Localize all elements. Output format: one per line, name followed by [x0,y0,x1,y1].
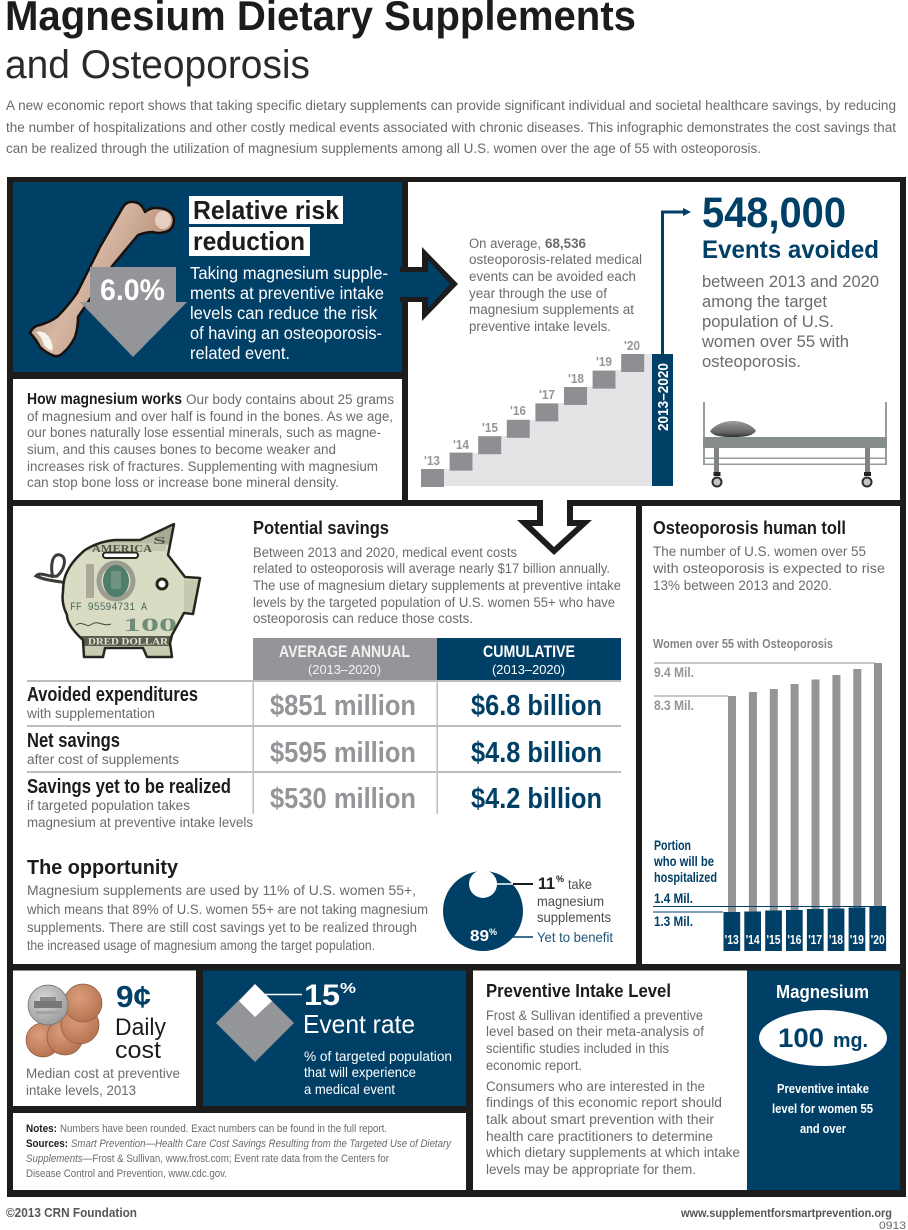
panel: osteoporosis human toll [642,506,900,964]
text: median cost: Median cost at preventive [26,1065,180,1081]
chart: 11 / 89 percent circle: % [489,927,497,937]
stat: 548,000 events avoided: population of U.S. [702,312,834,331]
stat: 548,000 events avoided: between 2013 and 2020 [702,272,879,291]
arrow: down to savings [517,500,592,555]
bar chart: women over 55 with osteoporosis: hospitalized [654,869,717,885]
text: savings description [253,545,621,626]
stat: 548,000 events avoided: osteoporosis. [702,352,801,371]
bar chart: women over 55 with osteoporosis: '20 [871,933,885,947]
panel: osteoporosis human toll: The number of U.S. women over 55 [653,544,866,559]
panel: how magnesium works: How magnesium works [27,391,182,408]
icon: coins [26,984,102,1057]
intro text: the number of hospitalizations and other costly medical events associated with chronic diseases. This infographic demonstrates the cost savings that [6,120,896,135]
table: savings: Net savings [27,730,120,752]
bar chart: women over 55 with osteoporosis: '15 [766,933,781,947]
bar chart: women over 55 with osteoporosis [653,636,886,951]
intro text [6,98,896,156]
panel: preventive intake level: Frost & Sullivan identified a preventive [486,1007,703,1023]
text: opportunity description [26,882,428,953]
table: savings: Avoided expenditures [27,684,198,706]
chart: stair steps 2013-2020 [421,338,652,487]
chart: stair steps 2013-2020: '17 [539,387,555,402]
text: average events: osteoporosis-related medical [469,252,642,267]
stat: 9 cents [115,979,166,1064]
chart: 11 / 89 percent circle: 11 [538,874,555,893]
panel: osteoporosis human toll: with osteoporosis is expected to rise [652,561,885,576]
chart: 11 / 89 percent circle: magnesium [537,893,604,909]
panel: how magnesium works: our bones naturally lose essential minerals, such as magne- [27,425,381,440]
table: savings: AVERAGE ANNUAL [279,642,410,661]
panel: magnesium 100 mg [747,970,900,1190]
text: average events: year through the use of [469,286,607,301]
text: average events: magnesium supplements at [469,302,634,317]
panel: preventive intake level: health care practitioners to determine [486,1128,713,1144]
stat: 548,000 events avoided: Events avoided [702,236,879,264]
table: savings: (2013–2020) [492,662,565,677]
panel: preventive intake level: findings of this economic report should [486,1094,722,1110]
icon: piggy bank made of money: S [153,535,166,547]
panel: notes and sources: Smart Prevention—Health Care Cost Savings Resulting from the Targeted Use of Dietary [71,1138,452,1150]
arrow: 6.0% down: 6.0% [100,274,165,307]
title [5,0,636,87]
text: risk description: of having an osteoporosis- [190,323,382,343]
text: opportunity description: supplements. There are still cost savings yet to be realized through [27,919,417,935]
bar chart: women over 55 with osteoporosis: '17 [808,933,822,947]
heading: relative risk reduction [189,195,343,256]
stat: 15 percent event rate: that will experience [304,1064,416,1080]
table: savings: Savings yet to be realized [27,776,231,798]
table: savings: with supplementation [26,706,155,721]
text: risk description: levels can reduce the risk [190,303,377,323]
bar chart: women over 55 with osteoporosis: 8.3 Mil. [654,697,694,713]
panel: how magnesium works [13,379,402,500]
icon: piggy bank made of money: AMERICA [92,544,153,555]
chart: stair steps 2013-2020: '13 [424,453,440,468]
stat: 15 percent event rate: % of targeted population [304,1048,452,1064]
table: savings: $4.8 billion [471,737,602,769]
text: average events: 68,536 [545,236,586,251]
bar: 2013-2020 with arrow: 2013–2020 [655,363,672,431]
intro text: can be realized through the utilization of magnesium supplements among all U.S. women over the age of 55 with osteoporosis. [6,141,761,156]
panel: preventive intake level: talk about smart prevention with their [486,1111,714,1127]
chart: 11 / 89 percent circle: Yet to benefit [537,929,613,945]
panel: notes and sources: Supplements—Frost & Sullivan, www.frost.com; Event rate data from the Centers for [26,1153,389,1165]
chart: stair steps 2013-2020: '20 [624,338,640,353]
chart: 11 / 89 percent circle [443,870,613,951]
table: savings: CUMULATIVE [483,642,575,661]
panel: preventive intake level: Consumers who are interested in the [486,1078,705,1094]
panel: how magnesium works: increases risk of fractures. Supplementing with magnesium [27,459,378,474]
icon: piggy bank made of money: DRED DOLLAR [88,636,169,646]
panel: preventive intake level: which dietary supplements at which intake [485,1144,740,1160]
chart: 11 / 89 percent circle: 89 [470,928,489,945]
panel: magnesium 100 mg: and over [800,1121,846,1136]
table: savings: $595 million [270,737,416,769]
icon: diamond 15 percent [216,984,302,1062]
stat: 15 percent event rate: Event rate [303,1009,415,1039]
text: savings description: related to osteoporosis will average nearly $17 billion annually. [253,561,610,576]
text: average events: preventive intake levels. [469,319,611,334]
arrow: 6.0% down [80,267,187,357]
panel: magnesium 100 mg: Magnesium [776,982,869,1002]
chart: 11 / 89 percent circle: supplements [537,909,611,925]
heading: the opportunity: The opportunity [27,857,179,879]
intro text: A new economic report shows that taking specific dietary supplements can provide significant individual and societal healthcare savings, by reducing [6,98,896,113]
panel: preventive intake level: levels may be appropriate for them. [486,1161,696,1177]
panel: how magnesium works: of magnesium and over half is found in the bones. As we age, [27,409,393,424]
chart: stair steps 2013-2020: '16 [510,403,526,418]
chart: 11 / 89 percent circle: take [568,876,592,892]
text: risk description: ments at preventive intake [190,283,384,303]
panel: preventive intake level: Preventive Intake Level [486,981,671,1001]
chart: stair steps 2013-2020: '18 [568,371,584,386]
table: savings: (2013–2020) [308,662,381,677]
text: savings description: osteoporosis can reduce those costs. [253,611,473,626]
chart: 11 / 89 percent circle: % [556,874,564,884]
panel: magnesium 100 mg: level for women 55 [772,1101,873,1116]
text: median cost: intake levels, 2013 [26,1082,136,1098]
panel: preventive intake level: scientific studies included in this [486,1040,669,1056]
icon: hospital bed [703,402,887,486]
text: risk description: related event. [190,343,290,363]
footer: copyright: ©2013 CRN Foundation [6,1206,137,1220]
panel: notes and sources: Disease Control and Prevention, www.cdc.gov. [26,1168,227,1180]
text: opportunity description: Magnesium supplements are used by 11% of U.S. women 55+, [27,882,416,898]
panel: potential savings [13,506,636,964]
stat: 15 percent event rate [303,979,452,1097]
text: average events: On average, [469,236,541,251]
text: average events: events can be avoided each [469,269,636,284]
panel: event rate [203,970,466,1106]
panel: how magnesium works: sium, and this causes bones to become weaker and [27,442,336,457]
panel: magnesium 100 mg: Preventive intake [777,1081,869,1096]
icon: piggy bank made of money: 100 [123,615,177,636]
bar chart: women over 55 with osteoporosis: '14 [746,933,760,947]
arrow: right from risk panel [400,247,458,321]
text: median cost [26,1065,180,1098]
icon: piggy bank made of money [36,520,205,660]
bar: 2013-2020 with arrow [652,208,691,486]
panel: events avoided [408,182,900,500]
panel: osteoporosis human toll: 13% between 2013 and 2020. [653,578,832,593]
panel: magnesium 100 mg: mg. [833,1030,868,1052]
panel: preventive intake level: economic report. [486,1057,582,1073]
table: savings: $4.2 billion [471,783,602,815]
bar chart: women over 55 with osteoporosis: '13 [725,933,739,947]
heading: relative risk reduction: Relative risk [193,195,340,225]
bar chart: women over 55 with osteoporosis: 1.4 Mil. [654,890,693,906]
panel: magnesium 100 mg: 100 [778,1023,824,1053]
icon: piggy bank made of money: FF 95594731 A [70,602,147,614]
stat: 9 cents: 9¢ [116,979,151,1014]
stat: 548,000 events avoided: women over 55 with [701,332,849,351]
bar chart: women over 55 with osteoporosis: '18 [829,933,843,947]
table: savings [26,638,621,830]
panel: how magnesium works: Our body contains about 25 grams [186,392,394,407]
table: savings: magnesium at preventive intake levels [27,815,253,830]
panel: notes and sources [13,1113,466,1190]
bar chart: women over 55 with osteoporosis: 1.3 Mil. [654,913,693,929]
bar chart: women over 55 with osteoporosis: '16 [787,933,801,947]
panel: daily cost [13,970,196,1106]
text: risk description: Taking magnesium supple- [190,263,388,283]
stat: 9 cents: cost [115,1037,161,1064]
bar chart: women over 55 with osteoporosis: 9.4 Mil. [654,664,694,680]
panel: preventive intake level [473,970,747,1190]
heading: relative risk reduction: reduction [193,226,305,256]
title: and Osteoporosis [5,43,310,87]
panel: how magnesium works: can stop bone loss or increase bone mineral density. [27,475,339,490]
table: savings: $530 million [270,783,416,815]
text: savings description: The use of magnesium dietary supplements at preventive intake [253,578,621,593]
bar chart: women over 55 with osteoporosis: Women over 55 with Osteoporosis [653,636,833,651]
panel: osteoporosis human toll: Osteoporosis human toll [653,518,846,538]
text: opportunity description: the increased usage of magnesium among the target population. [27,937,375,953]
text: average events [469,236,642,334]
bar chart: women over 55 with osteoporosis: '19 [850,933,864,947]
panel: notes and sources: Numbers have been rounded. Exact numbers can be found in the full report. [60,1123,387,1135]
panel: preventive intake level: level based on their meta-analysis of [486,1023,704,1039]
chart: stair steps 2013-2020: '15 [482,420,498,435]
stat: 15 percent event rate: 15 [304,979,340,1012]
text: risk description [190,263,388,363]
panel: relative risk reduction [13,182,402,372]
table: savings: if targeted population takes [27,798,190,813]
footer: website: www.supplementforsmartprevention.org [680,1206,892,1220]
stat: 548,000 events avoided: 548,000 [702,189,846,237]
stat: 548,000 events avoided: among the target [702,292,827,311]
heading: potential savings: Potential savings [253,518,389,538]
table: savings: $851 million [270,690,416,722]
stat: 15 percent event rate: a medical event [304,1081,395,1097]
text: opportunity description: which means that 89% of U.S. women 55+ are not taking magnesium [26,901,428,917]
bar chart: women over 55 with osteoporosis: Portion [654,837,691,853]
panel: notes and sources: Sources: [26,1138,68,1150]
chart: stair steps 2013-2020: '19 [596,354,612,369]
text: savings description: levels by the targeted population of U.S. women 55+ who have [253,595,615,610]
text: savings description: Between 2013 and 2020, medical event costs [253,545,517,560]
table: savings: after cost of supplements [27,752,179,767]
stat: 9 cents: Daily [115,1014,166,1041]
table: savings: $6.8 billion [471,690,602,722]
stat: 15 percent event rate: % [340,980,356,997]
stat: 548,000 events avoided [701,189,879,371]
bar chart: women over 55 with osteoporosis: who will be [653,853,714,869]
icon: bone [30,202,174,356]
panel: notes and sources: Notes: [26,1123,57,1135]
chart: stair steps 2013-2020: '14 [453,437,470,452]
